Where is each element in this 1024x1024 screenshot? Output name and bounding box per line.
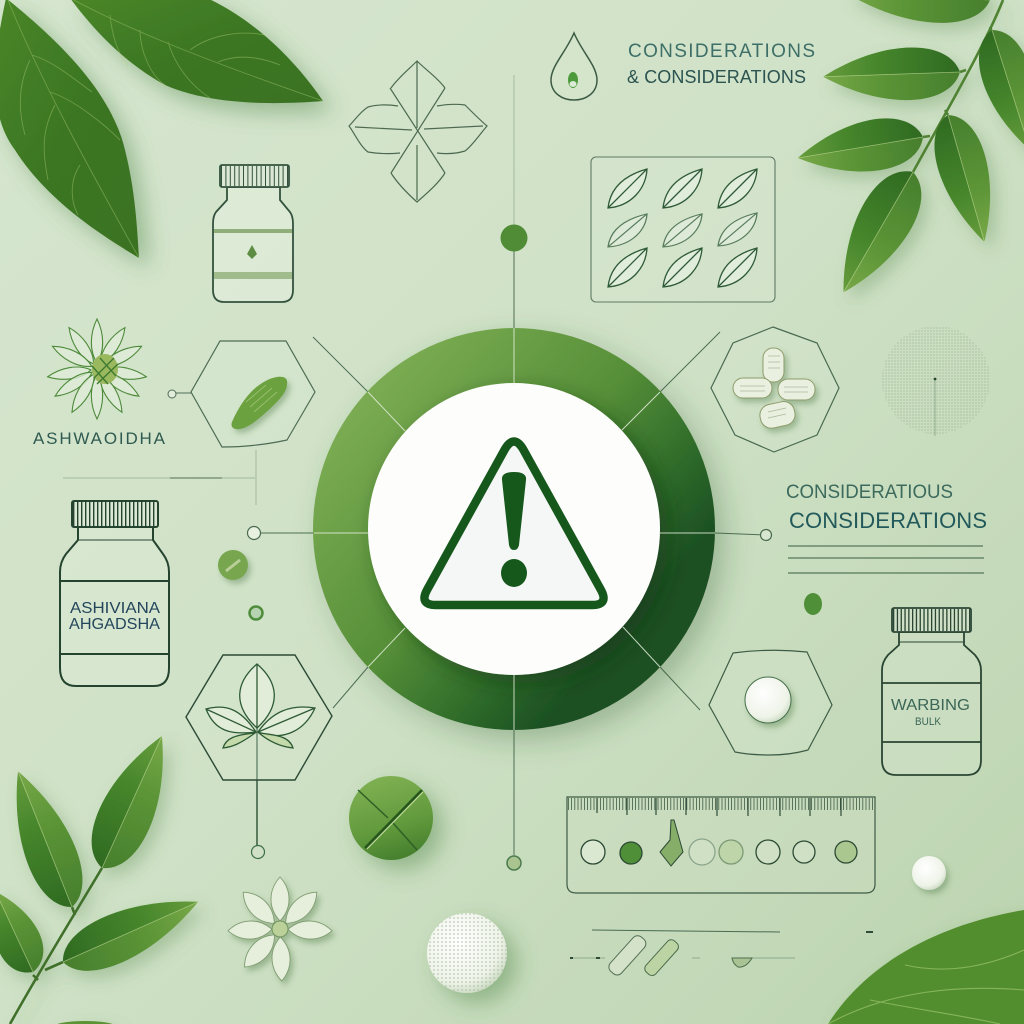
white flower — [228, 877, 332, 981]
icon: plant leaves — [206, 664, 315, 748]
small green pill — [218, 550, 248, 580]
dose circles — [581, 820, 857, 866]
four capsules — [733, 348, 815, 430]
icon: water drop — [551, 33, 597, 100]
text: top heading: & CONSIDERATIONS — [627, 67, 806, 87]
connector lines — [63, 75, 765, 855]
label text: right bottle: WARBING — [891, 697, 970, 714]
leaf: top left second — [70, 0, 323, 103]
label text: left bottle: AHGADSHA — [69, 616, 160, 633]
hexagon: white tablet — [709, 650, 832, 755]
row of leaves 1 — [608, 169, 757, 208]
bottle: right warning — [882, 608, 981, 775]
node: top green dot — [500, 224, 528, 252]
small white pill — [912, 856, 946, 890]
central warning badge — [313, 328, 715, 730]
plant node — [252, 846, 264, 858]
leaf: top left large — [0, 0, 139, 258]
lower details — [570, 930, 873, 978]
capsule — [231, 377, 287, 429]
text: top heading — [627, 41, 815, 87]
text block: considerations — [786, 482, 987, 573]
mini leaf — [732, 958, 752, 967]
row of leaves 2 — [608, 213, 757, 247]
mini capsule 2 — [643, 938, 681, 978]
node: left ring — [248, 526, 260, 540]
label: ashwagandha: ASHWAOIDHA — [33, 429, 166, 448]
panel: leaf grid — [591, 157, 775, 302]
label text: right bottle: BULK — [915, 716, 942, 728]
dotted circle — [882, 326, 990, 436]
ruler ticks — [568, 798, 874, 810]
mini capsule 1 — [606, 933, 648, 977]
bottle: top small — [213, 165, 293, 302]
branch: top right with leaves — [794, 0, 1024, 306]
text: top heading: CONSIDERATIONS — [628, 41, 815, 62]
link ring — [168, 390, 176, 398]
small green oval — [804, 593, 822, 615]
panel: ruler with dose dots — [567, 797, 875, 893]
icon: warning triangle — [424, 442, 604, 605]
dots — [570, 932, 873, 958]
row of leaves 3 — [608, 248, 757, 287]
text block: considerations: CONSIDERATIOUS — [786, 482, 953, 503]
white disc — [368, 383, 660, 675]
label text: right bottle — [891, 697, 970, 728]
node: right ring — [760, 530, 772, 540]
label text: left bottle — [69, 600, 160, 633]
leaf: bottom right — [828, 910, 1024, 1024]
major ticks — [597, 798, 841, 816]
icon: ashwagandha flower — [47, 319, 147, 419]
small ring pill — [250, 606, 262, 620]
hexagon: plant — [186, 655, 332, 858]
icon: four-leaf outline — [349, 61, 487, 202]
bottle: large left — [60, 501, 169, 686]
node: bottom dot — [507, 856, 521, 870]
white tablet — [745, 677, 791, 723]
label text: left bottle: ASHIVIANA — [70, 600, 160, 617]
textured white ball — [427, 913, 507, 993]
hexagon: capsule — [168, 341, 315, 447]
green scored tablet — [349, 776, 433, 860]
text block: considerations: CONSIDERATIONS — [789, 508, 987, 533]
branch: bottom left with leaves — [0, 725, 208, 1024]
spokes over ring — [314, 328, 715, 730]
green ring — [313, 328, 715, 730]
octagon: capsules — [711, 327, 839, 452]
